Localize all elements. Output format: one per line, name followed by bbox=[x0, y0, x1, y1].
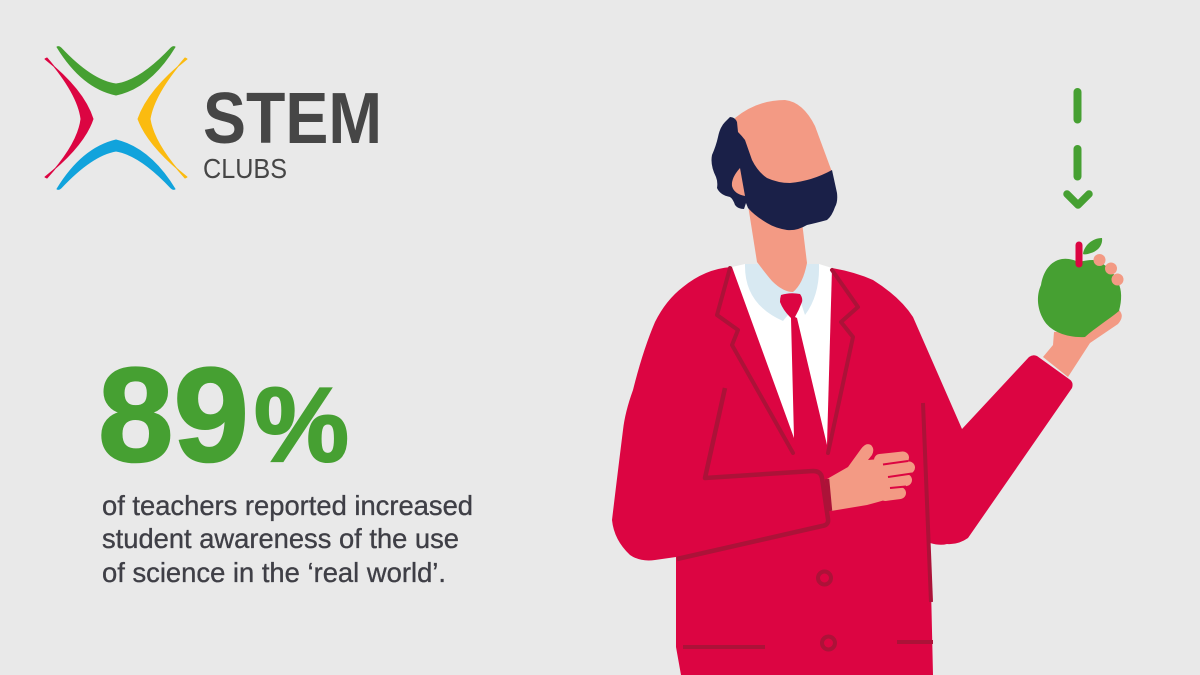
head bbox=[735, 100, 832, 215]
apple leaf bbox=[1083, 238, 1102, 254]
icon: raised hand holding apple bbox=[1038, 238, 1124, 377]
icon: dashed arrow pointing down bbox=[1067, 92, 1089, 205]
shirt bbox=[732, 264, 832, 445]
jacket front line bbox=[923, 403, 931, 602]
statistic description: of teachers reported increased bbox=[102, 490, 473, 521]
statistic description bbox=[102, 490, 473, 588]
logo mark: red arc bbox=[45, 58, 93, 178]
logo mark: green arc bbox=[57, 47, 175, 95]
logo: STEM Clubs bbox=[45, 47, 382, 189]
jacket button bbox=[822, 636, 835, 650]
logo wordmark: STEM: STEM bbox=[203, 79, 382, 159]
apple bbox=[1038, 259, 1121, 337]
illustration: man in red suit bbox=[612, 100, 1073, 675]
statistic description: of science in the ‘real world’. bbox=[102, 557, 446, 588]
jacket lapel lines bbox=[717, 268, 858, 453]
logo wordmark: CLUBS: CLUBS bbox=[203, 153, 287, 184]
beard and hair bbox=[712, 117, 837, 230]
logo mark: blue arc bbox=[57, 140, 175, 189]
headline statistic: 89%: % bbox=[254, 366, 349, 484]
logo mark: yellow arc bbox=[138, 58, 187, 178]
fingers bbox=[1094, 254, 1106, 266]
headline statistic: 89% bbox=[98, 341, 349, 490]
jacket sleeve line bbox=[677, 388, 828, 559]
neck bbox=[748, 205, 807, 292]
ear bbox=[732, 168, 745, 196]
jacket bbox=[612, 267, 1073, 675]
hand on chest bbox=[827, 444, 912, 511]
statistic description: student awareness of the use bbox=[102, 523, 459, 554]
hand bbox=[1043, 309, 1122, 377]
shirt collar bbox=[745, 264, 819, 321]
tie bbox=[780, 293, 829, 460]
jacket button bbox=[818, 572, 831, 584]
headline statistic: 89%: 89 bbox=[98, 341, 249, 490]
jacket pockets bbox=[683, 642, 933, 647]
apple stem bbox=[1076, 245, 1082, 264]
sleeve cuff line over wrist bbox=[827, 479, 830, 511]
